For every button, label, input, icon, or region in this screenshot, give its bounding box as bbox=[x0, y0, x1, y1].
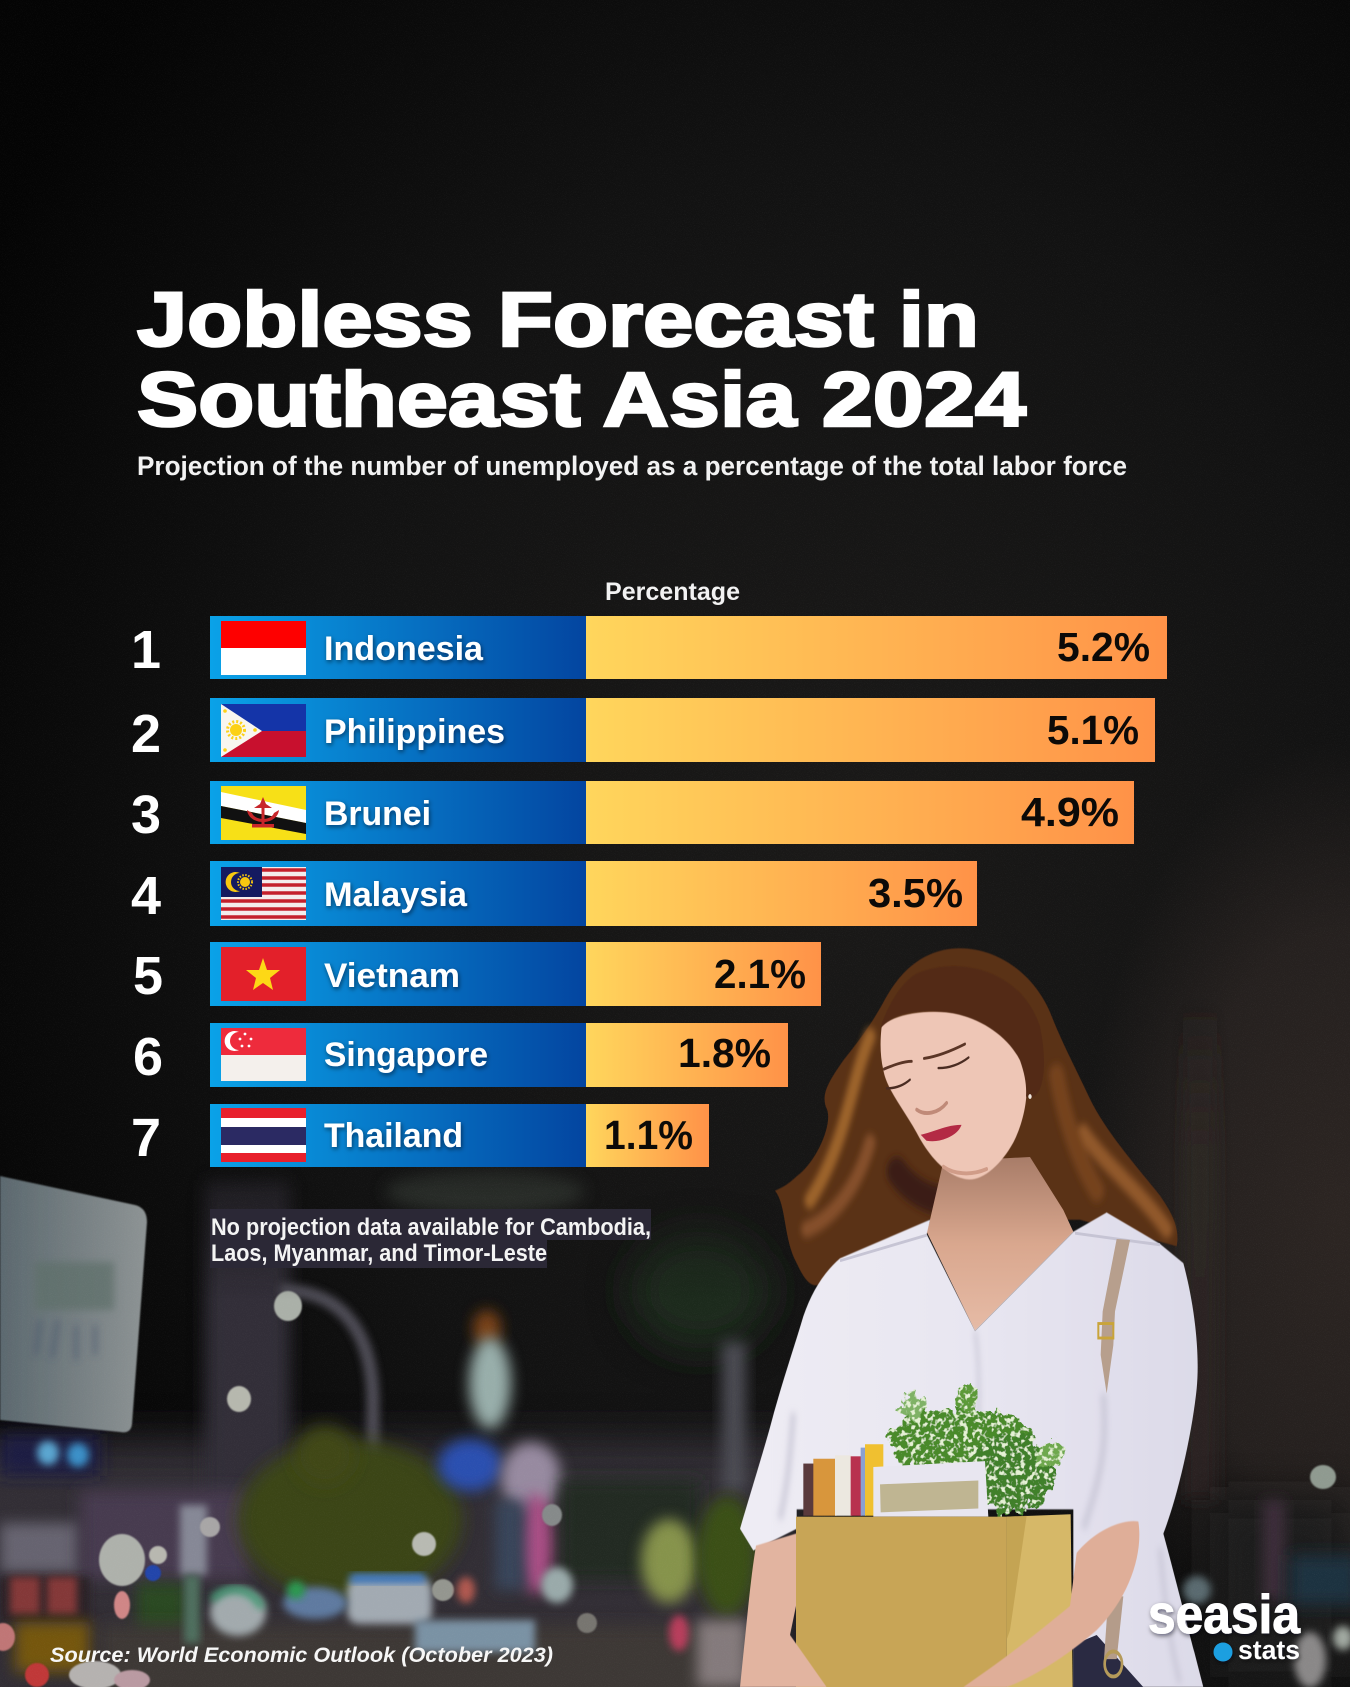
row 5: Vietnam: 5 bbox=[133, 946, 163, 1006]
background: sign markings bbox=[34, 1262, 114, 1360]
bag clasp bbox=[1105, 1651, 1122, 1677]
row 2: Philippines: Philippines bbox=[324, 713, 505, 751]
row 5: Vietnam bbox=[133, 942, 821, 1006]
row 4: Malaysia bbox=[131, 861, 977, 926]
background: white street sign bbox=[0, 1176, 147, 1432]
row 2: Philippines: 5.1% bbox=[1047, 707, 1139, 753]
row 6: Singapore bbox=[133, 1023, 788, 1087]
row 1: Indonesia: 5.2% bbox=[1057, 624, 1150, 670]
facial features bbox=[884, 1044, 987, 1173]
panel: ranked bar chart bbox=[131, 616, 1167, 1168]
source line: Source: World Economic Outlook (October 2023) bbox=[50, 1644, 553, 1667]
hair over forehead bbox=[880, 966, 1044, 1098]
row 2: Philippines bbox=[131, 698, 1155, 764]
background: blurred night city street bbox=[0, 1169, 1350, 1687]
row 2: Philippines: 2 bbox=[131, 704, 161, 764]
title: Jobless Forecast in bbox=[137, 277, 979, 363]
shoulder bag strap bbox=[1101, 1239, 1130, 1394]
row 7: Thailand: Thailand bbox=[324, 1117, 463, 1155]
row 3: Brunei: 4.9% bbox=[1021, 789, 1119, 835]
row 4: Malaysia: 3.5% bbox=[868, 870, 963, 916]
row 6: Singapore: 6 bbox=[133, 1027, 163, 1087]
logo: seasia stats: seasia bbox=[1148, 1583, 1300, 1645]
cardboard box bbox=[796, 1514, 1073, 1687]
row 5: Vietnam: Vietnam bbox=[324, 957, 460, 995]
hair highlights bbox=[807, 1036, 1167, 1229]
bag strap lower bbox=[1104, 1596, 1123, 1659]
hair bbox=[775, 948, 1178, 1285]
books bbox=[803, 1444, 883, 1516]
trousers bbox=[1073, 1635, 1143, 1687]
row 3: Brunei bbox=[131, 781, 1134, 845]
footnote: no data available bbox=[210, 1209, 651, 1268]
row 4: Malaysia: Malaysia bbox=[324, 876, 468, 914]
plant bbox=[890, 1384, 1065, 1512]
column heading: percentage: Percentage bbox=[605, 578, 740, 606]
row 1: Indonesia: Indonesia bbox=[324, 630, 484, 668]
figure: woman carrying a box of belongings bbox=[740, 948, 1203, 1687]
row 7: Thailand: 1.1% bbox=[604, 1112, 693, 1158]
right forearm and hand bbox=[963, 1521, 1139, 1687]
row 3: Brunei: 3 bbox=[131, 785, 161, 845]
desk calculator bbox=[873, 1461, 988, 1517]
face bbox=[881, 1012, 1027, 1179]
subtitle: Projection of the number of unemployed as a percentage of the total labor force bbox=[137, 451, 1127, 481]
row 1: Indonesia bbox=[131, 616, 1167, 680]
background: brown column and wall on the right bbox=[1080, 740, 1350, 1687]
shirt bbox=[740, 1212, 1203, 1687]
row 3: Brunei: Brunei bbox=[324, 795, 431, 833]
title bbox=[137, 277, 1026, 443]
title: Southeast Asia 2024 bbox=[137, 357, 1026, 443]
row 6: Singapore: Singapore bbox=[324, 1036, 488, 1074]
row 1: Indonesia: 1 bbox=[131, 620, 161, 680]
neck and chest bbox=[927, 1157, 1073, 1331]
shirt collar and shading bbox=[780, 1233, 1180, 1683]
footnote: no data available: Laos, Myanmar, and Timor-Leste bbox=[211, 1240, 547, 1267]
earring bbox=[1028, 1094, 1032, 1099]
logo: seasia stats: stats bbox=[1238, 1635, 1300, 1665]
row 4: Malaysia: 4 bbox=[131, 866, 161, 926]
left forearm and hand bbox=[740, 1534, 827, 1687]
row 7: Thailand bbox=[131, 1104, 709, 1168]
row 6: Singapore: 1.8% bbox=[678, 1030, 771, 1076]
footnote: no data available: No projection data available for Cambodia, bbox=[211, 1214, 651, 1241]
row 7: Thailand: 7 bbox=[131, 1108, 161, 1168]
row 5: Vietnam: 2.1% bbox=[714, 951, 806, 997]
